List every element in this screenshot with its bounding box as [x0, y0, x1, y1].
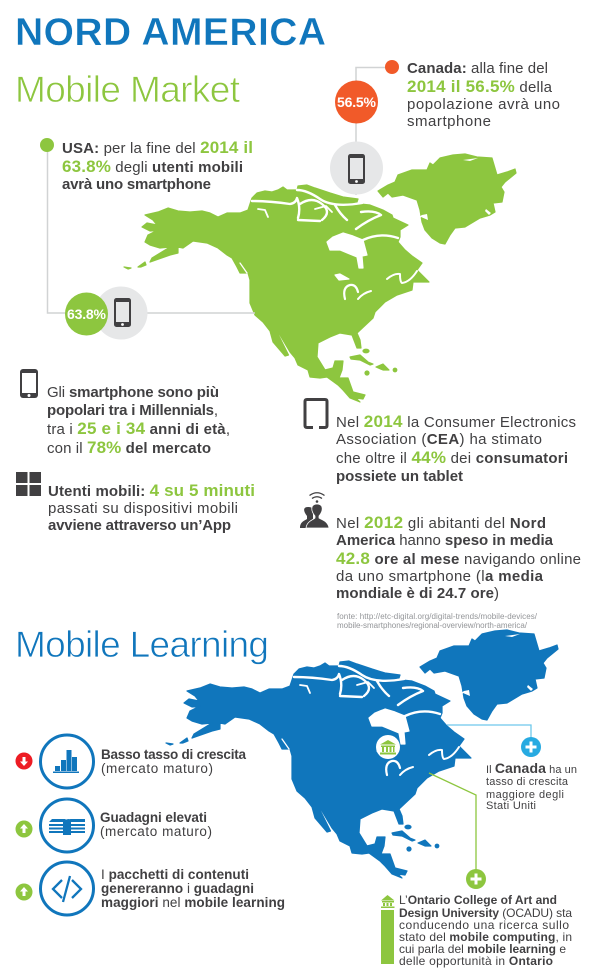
icon: app grid [16, 472, 41, 496]
text: online hours: mondiale è di 24.7 ore) [336, 585, 499, 602]
callout: USA: 63.8% degli utenti mobili [62, 157, 243, 176]
callout: OCADU: cui parla del mobile learning e [399, 942, 566, 956]
callout: Canada: popolazione avrà uno [407, 96, 560, 113]
row: high earnings: Guadagni elevati [100, 810, 207, 825]
heading: Mobile Learning: Mobile Learning [15, 624, 269, 665]
icon: USA phone with 63.8% badge: 63.8% [67, 306, 107, 322]
map: green North America [124, 154, 516, 402]
icon: Canada phone with 56.5% badge [330, 80, 383, 194]
text: Utenti mobili: avviene attraverso un’App [48, 517, 231, 534]
text: Millennials: popolari tra i Millennials, [47, 402, 218, 419]
text: Millennials: tra i 25 e i 34 anni di età, [47, 419, 230, 438]
row: low growth: (mercato maturo) [101, 761, 213, 776]
callout: Canada: Canada: alla fine del [407, 60, 548, 77]
row: low growth [16, 735, 246, 788]
title: NORD AMERICA [15, 11, 326, 54]
callout: Canada growth: tasso di crescita [486, 776, 569, 788]
callout: OCADU: stato del mobile computing, in [399, 930, 572, 944]
callout: OCADU: Design University (OCADU) sta [399, 906, 572, 920]
text: online hours: 42.8 ore al mese navigando online [336, 549, 581, 568]
callout: Canada [356, 60, 560, 195]
row: low growth: Basso tasso di crescita [101, 747, 246, 762]
text: tablet: Nel 2014 la Consumer Electronics [336, 412, 576, 431]
icon: institution marker [376, 735, 400, 759]
text: Millennials [47, 384, 230, 457]
callout: Canada: 2014 il 56.5% della [407, 77, 553, 96]
source note [337, 612, 538, 630]
text: Millennials: Gli smartphone sono più [47, 384, 219, 401]
text: tablet: Association (CEA) ha stimato [336, 431, 542, 448]
map: blue North America [166, 630, 558, 878]
row: high earnings: (mercato maturo) [100, 824, 212, 839]
text: online hours: America hanno speso in media [336, 532, 554, 549]
callout: OCADU: L’Ontario College of Art and [399, 893, 557, 907]
row: content packages: genereranno i guadagni [101, 881, 254, 896]
icon: USA phone with 63.8% badge [65, 286, 148, 340]
callout: Canada growth: Stati Uniti [486, 800, 536, 812]
callout: OCADU [381, 773, 572, 968]
text: tablet: possiete un tablet [336, 468, 463, 485]
row: high earnings [16, 799, 212, 852]
callout: USA: avrà uno smartphone [62, 176, 211, 193]
text: Utenti mobili: passati su dispositivi mobili [48, 500, 238, 517]
text: Utenti mobili: Utenti mobili: 4 su 5 minuti [48, 481, 255, 500]
text: online hours [336, 513, 581, 602]
icon: tablet [305, 400, 327, 428]
callout: Canada: smartphone [407, 113, 491, 130]
callout: USA [40, 138, 255, 313]
text: tablet [336, 412, 576, 485]
callout: OCADU: delle opportunità in Ontario [399, 954, 553, 968]
text: online hours: Nel 2012 gli abitanti del Nord [336, 513, 546, 532]
icon: people with wifi [300, 493, 329, 528]
row: content packages: maggiori nel mobile learning [101, 895, 285, 910]
callout: Canada growth [447, 725, 577, 812]
heading: Mobile Market: Mobile Market [15, 69, 241, 110]
source note: mobile-smartphones/regional-overview/north-america/ [337, 621, 528, 630]
text: online hours: da uno smartphone (la media [336, 568, 544, 585]
icon: smartphone [20, 369, 38, 398]
callout: OCADU: conducendo una ricerca sullo [399, 918, 569, 932]
icon: Canada phone with 56.5% badge: 56.5% [337, 94, 377, 110]
row: content packages: I pacchetti di contenuti [101, 867, 249, 882]
callout: USA: USA: per la fine del 2014 il [62, 138, 253, 157]
text: Millennials: con il 78% del mercato [47, 438, 211, 457]
text: tablet: che oltre il 44% dei consumatori [336, 448, 568, 467]
callout: Canada growth: maggiore degli [486, 789, 564, 801]
row: content packages [16, 862, 285, 915]
callout: Canada growth: Il Canada ha un [486, 760, 577, 776]
source note: fonte: http://etc-digital.org/digital-trends/mobile-devices/ [337, 612, 538, 621]
text: Utenti mobili [48, 481, 255, 534]
